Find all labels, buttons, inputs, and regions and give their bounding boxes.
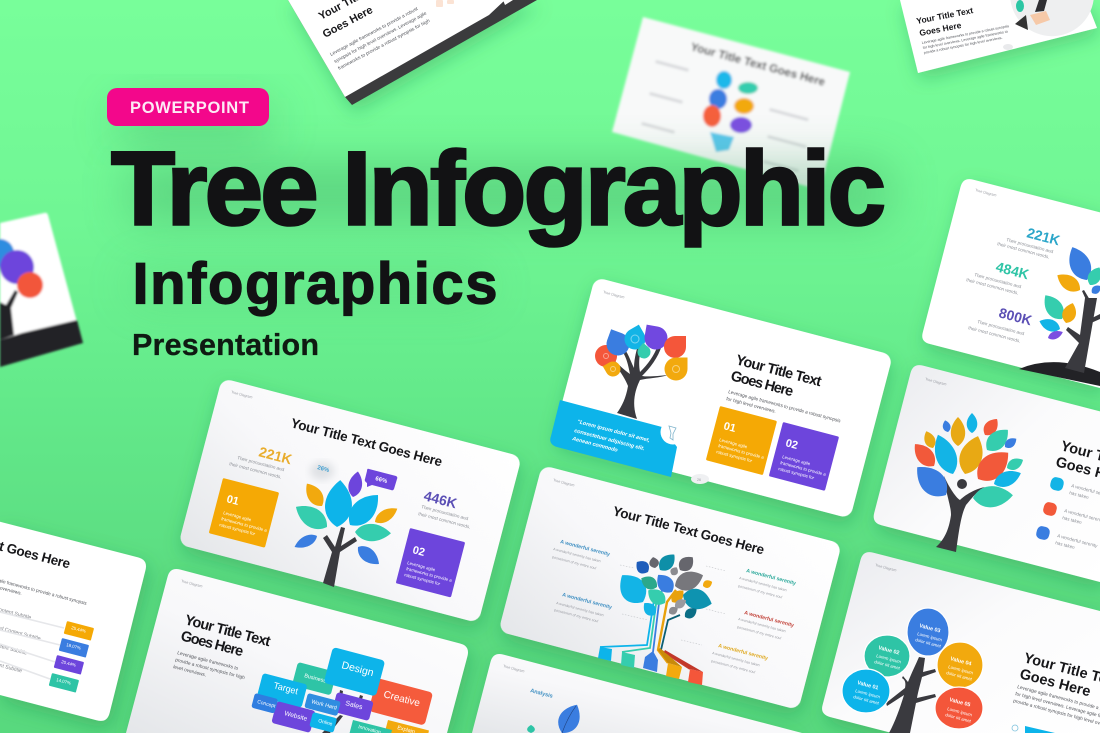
top left slide title [317, 0, 389, 41]
stat 800K [968, 304, 1034, 344]
stat 221K [229, 443, 294, 480]
box sales [332, 692, 374, 721]
box 02: robust synopsis for [778, 466, 815, 480]
tree [1037, 243, 1100, 373]
value 03: dolor sit amet [915, 637, 942, 649]
value 05 [935, 687, 983, 729]
value badges [49, 621, 94, 693]
tree [594, 325, 688, 419]
value 04: Value 04 [949, 656, 972, 667]
stat 221K [997, 224, 1062, 260]
stat 446K: 446K [422, 487, 459, 511]
page number [691, 474, 709, 484]
box explain [385, 720, 429, 733]
top right page tag [1003, 44, 1013, 50]
value 05: Value 05 [948, 697, 971, 708]
tree leaves [612, 550, 715, 621]
box 02: 02 [784, 437, 799, 452]
top right title: Goes Here [918, 20, 962, 38]
stat 484K: their most common words. [966, 277, 1019, 296]
body text: provide a robust synopsis for high [174, 657, 246, 681]
cyan panel [550, 400, 686, 477]
slide: right middle colorful tree [874, 365, 1100, 582]
body text: Leverage agile frameworks to provide a robust synopsis [727, 389, 842, 425]
label: Tree Diagram [553, 478, 575, 488]
box design [324, 647, 385, 696]
title: Goes Here [179, 628, 245, 660]
value 04 [937, 642, 983, 688]
right notes: A wonderful serenity [745, 568, 797, 587]
stat 484K [966, 258, 1031, 296]
blurred side text [641, 60, 809, 172]
top left slide title: Goes Here [321, 4, 375, 41]
value badges: 18.07% [66, 642, 82, 651]
title: Your Title Text [734, 352, 823, 390]
box sales: Sales [344, 700, 364, 712]
body text: for high level overviews. [725, 396, 777, 415]
cyan panel: consectetuer adipiscing elit. [573, 428, 646, 452]
stat 800K: Their pronunciation and [977, 319, 1025, 336]
slide: bottom design tree [126, 569, 468, 733]
box 02 [396, 528, 465, 597]
stat 446K: their most common words. [418, 511, 471, 530]
left notes: A wonderful serenity has taken [553, 547, 601, 563]
feature list [1035, 476, 1100, 550]
tree [291, 462, 400, 587]
feature list: A wonderful serenity [1057, 533, 1099, 549]
box 01: frameworks to provide a [718, 443, 765, 460]
box 01: frameworks to provide a [221, 516, 268, 533]
value 03 [907, 608, 949, 656]
stat 484K: 484K [994, 258, 1031, 282]
left notes: A wonderful serenity [559, 539, 611, 558]
value 02: dolor sit amet [874, 659, 901, 671]
hill [1019, 362, 1100, 386]
label: Tree Diagram [603, 290, 625, 300]
tree [909, 413, 1025, 552]
page number: 26 [697, 478, 701, 482]
stat 800K: 800K [997, 304, 1034, 328]
slide: bottom left bars [0, 517, 146, 721]
row lines [0, 612, 64, 679]
box 01: 01 [225, 493, 240, 508]
callout 66% [365, 469, 397, 490]
right notes: possession of my entire soul [738, 584, 783, 600]
title: Goes Here [729, 368, 795, 400]
stat 221K: their most common words. [997, 241, 1050, 260]
box 01: Leverage agile [719, 437, 748, 449]
box work hard: Work Hard [310, 699, 337, 712]
leaves [527, 700, 586, 733]
subtitle: Infographics [132, 252, 498, 316]
label: Tree Diagram [231, 390, 253, 400]
stat 221K: 221K [1025, 224, 1062, 248]
feature list: has taken [1062, 515, 1083, 525]
label: Tree Diagram [975, 188, 997, 198]
left slide tree [0, 239, 43, 340]
body text [1012, 684, 1100, 731]
value badges: 25.44% [71, 625, 87, 634]
box 02: robust synopsis for [404, 572, 441, 586]
box business [292, 662, 337, 695]
row labels [0, 603, 41, 675]
value 01 [842, 669, 890, 713]
dotted connectors [620, 565, 726, 645]
box work hard [304, 693, 341, 716]
value 01: Value 01 [856, 680, 879, 691]
value 04: Lorem ipsum [948, 664, 974, 675]
stat 221K: 221K [257, 443, 294, 467]
colored blocks [598, 647, 703, 685]
box 02: Leverage agile [407, 560, 436, 572]
value 02: Lorem ipsum [876, 653, 902, 664]
box creative: Creative [382, 689, 421, 709]
top left slide text: synopsis for high level overviews. Leverage agile [333, 10, 428, 65]
top right text [921, 24, 1010, 55]
top right title [915, 5, 974, 38]
box online [309, 712, 337, 733]
callout 26%: 26% [316, 465, 330, 474]
right notes: A wonderful serenity has taken [738, 617, 786, 633]
slide: center tree lines [498, 465, 842, 710]
top right text: for high level overviews. Leverage agile frameworks to [922, 30, 1008, 50]
left notes: possession of my entire soul [552, 555, 597, 571]
title shadow glow [120, 110, 890, 300]
box design: Design [340, 659, 375, 679]
value badges: 14.07% [56, 677, 72, 686]
value 05: Lorem ipsum [947, 706, 973, 717]
trunk [322, 690, 363, 733]
top right text: Leverage agile frameworks to provide a robust synopsis [921, 24, 1010, 45]
slide: left center 221K 446K tree [178, 378, 522, 623]
value 03: Lorem ipsum [917, 631, 943, 642]
label: Tree Diagram [875, 563, 897, 573]
left notes: A wonderful serenity has taken [556, 601, 604, 617]
analysis label: Analysis [529, 688, 553, 700]
slide: top center blurred [612, 17, 850, 190]
label: Tree Diagram [181, 579, 203, 589]
slide: right top 221K 484K 800K [922, 179, 1100, 388]
cyan panel: Aenean commodo [571, 436, 619, 454]
value 02: Value 02 [877, 645, 900, 656]
callout 66%: 66% [374, 476, 388, 485]
slide: top right partial [900, 0, 1097, 73]
box 01: 01 [722, 420, 737, 435]
box target: Target [272, 680, 300, 696]
box online: Online [317, 718, 333, 728]
value 02 [864, 635, 910, 677]
body text: Leverage agile frameworks to [176, 650, 239, 672]
title: Your Title Text Goes Here [289, 415, 444, 470]
right notes: A wonderful serenity [743, 610, 795, 629]
stat 221K: Their pronunciation and [237, 455, 285, 472]
value badges: 20.44% [61, 659, 77, 668]
box 01: robust synopsis for [716, 449, 753, 463]
box 02: Leverage agile [782, 454, 811, 466]
left notes: A wonderful serenity [561, 592, 613, 611]
trunk [886, 657, 936, 733]
stat 446K [418, 487, 471, 530]
right notes: possession of my entire soul [737, 625, 782, 641]
box 01: robust synopsis for [219, 522, 256, 536]
feature list: has taken [1069, 490, 1090, 500]
box website: Website [283, 710, 308, 723]
right notes: A wonderful serenity has taken [739, 576, 787, 592]
value 04: dolor sit amet [946, 670, 973, 682]
right notes: A wonderful serenity [717, 643, 769, 662]
tagline: Presentation [132, 328, 319, 362]
top right figure [1015, 0, 1050, 30]
label: Tree Diagram [925, 377, 947, 387]
value 05: dolor sit amet [945, 712, 972, 724]
top right circle [1010, 0, 1094, 36]
box 02 [769, 422, 839, 491]
stat 221K: their most common words. [229, 461, 282, 480]
slide: top left partial [288, 0, 537, 105]
box 02: frameworks to provide a [406, 566, 453, 583]
title: Your Title Text [183, 612, 272, 650]
slide: left blurred tree [0, 213, 83, 367]
box 02: 02 [411, 544, 426, 559]
box website [271, 701, 316, 733]
box 02: frameworks to provide a [780, 460, 827, 477]
stat 484K: Their pronunciation and [974, 272, 1022, 289]
top left slide text: Leverage agile frameworks to provide a robust [329, 6, 420, 58]
stat 221K: Their pronunciation and [1006, 237, 1054, 254]
top left slide tags [436, 0, 454, 7]
slide: bottom analysis [472, 654, 802, 733]
stat 800K: their most common words. [968, 325, 1021, 344]
left notes [552, 539, 613, 624]
left notes: possession of my entire soul [554, 608, 599, 624]
title: Goes Here [1018, 666, 1092, 700]
top left slide text: frameworks to provide a robust synopsis for high [337, 18, 431, 72]
value 01: Lorem ipsum [855, 688, 881, 699]
box 01 [209, 478, 279, 548]
slide: center cyan panel tree [550, 277, 893, 519]
box creative [368, 678, 433, 726]
title: Your Title Text Goes Here [611, 503, 766, 558]
box concept: Concept [256, 699, 277, 710]
box business: Business [303, 673, 327, 685]
top right title: Your Title Text [915, 5, 974, 26]
tree trunks [600, 578, 690, 669]
value 03: Value 03 [918, 623, 941, 634]
box 01: Leverage agile [223, 510, 252, 522]
box concept [251, 693, 278, 714]
box 01 [706, 406, 777, 475]
right notes: possession of my entire soul [711, 659, 756, 675]
main title: Tree Infographic [111, 131, 886, 248]
label: Tree Diagram [503, 664, 525, 674]
blurred tree leaves [703, 71, 758, 152]
badge: POWERPOINT [107, 88, 269, 126]
badge: POWERPOINT: POWERPOINT [130, 99, 249, 117]
top right text: provide a robust synopsis for high level overviews. [923, 36, 1003, 55]
cyan panel: "Lorem ipsum dolor sit amet, [576, 419, 651, 444]
right notes: A wonderful serenity has taken [712, 651, 760, 667]
slide: bottom right value tree [822, 552, 1100, 733]
body text: level overviews. [172, 664, 207, 679]
stat 446K: Their pronunciation and [421, 504, 469, 521]
box target [257, 673, 307, 708]
feature list: has taken [1055, 540, 1076, 550]
value 01: dolor sit amet [853, 694, 880, 706]
box innovation [350, 720, 392, 733]
cyan tab [1012, 725, 1055, 733]
blurred title: Your Title Text Goes Here [689, 41, 826, 89]
right notes [711, 568, 797, 675]
